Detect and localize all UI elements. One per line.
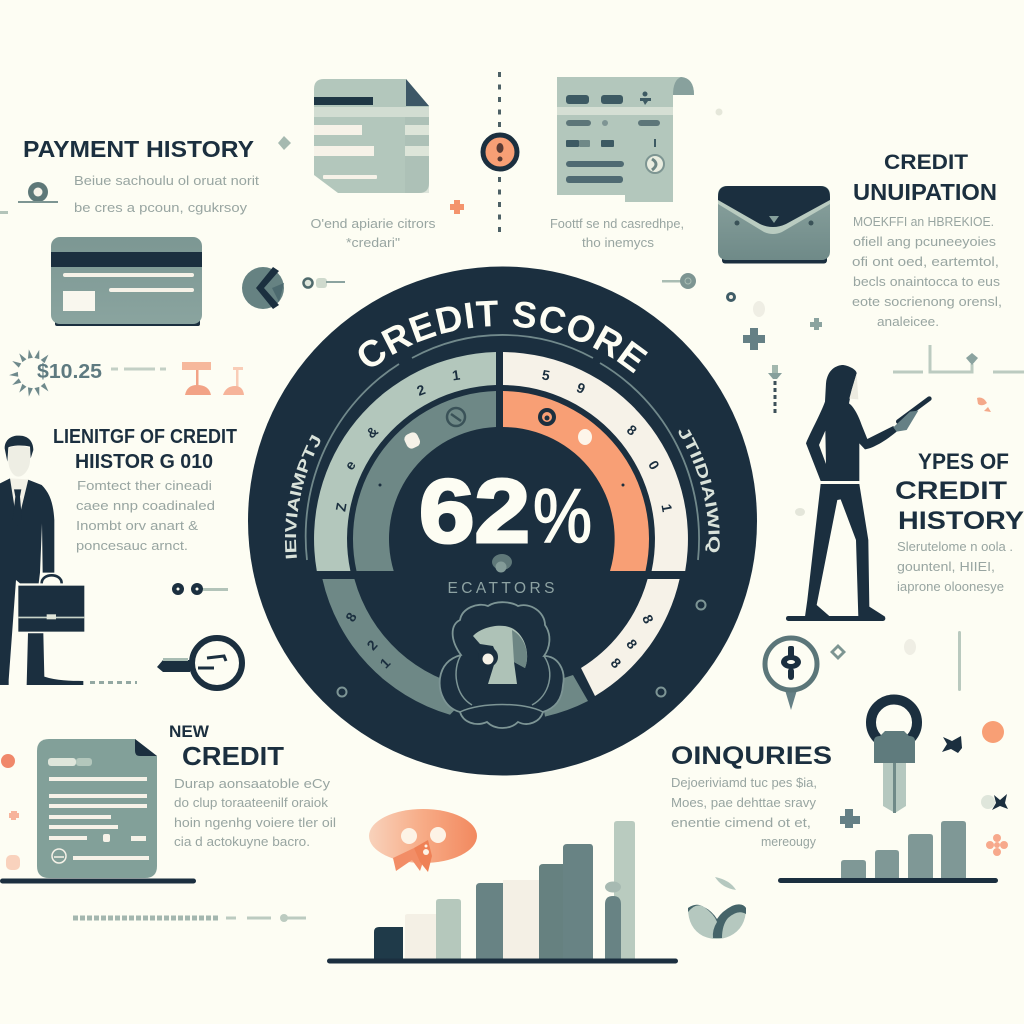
text block: new credit: hoin ngenhg voiere tler oil bbox=[174, 815, 336, 830]
heading: types of credit history: CREDIT bbox=[895, 477, 1007, 505]
faint blob bbox=[753, 301, 765, 317]
gauge numbers: 2 bbox=[415, 381, 428, 399]
text block: types of credit history: iaprone oloonesye bbox=[897, 579, 1004, 594]
text block: types of credit history: Slerutelome n oola . bbox=[897, 539, 1013, 554]
icon: teal plus bbox=[840, 809, 860, 828]
orange plus bbox=[450, 200, 464, 214]
left curved label: IEIVIAIMPTJ bbox=[284, 434, 320, 558]
gauge numbers: 1 bbox=[377, 654, 394, 671]
faint dot top bbox=[716, 108, 722, 116]
text block: inquiries: Dejoeriviamd tuc pes $ia, bbox=[671, 775, 817, 790]
big percentage: % bbox=[533, 474, 592, 559]
icon: link left of dial bbox=[304, 278, 345, 288]
bar chart: main bbox=[327, 821, 678, 964]
dotted connector bbox=[90, 681, 137, 684]
circuit connector bbox=[893, 345, 1024, 372]
peach petals bbox=[977, 398, 991, 412]
text block: length of credit history bbox=[76, 478, 215, 553]
gauge segment: bottom wedge bbox=[540, 675, 588, 717]
text block: new credit: cia d actokuyne bacro. bbox=[174, 834, 310, 849]
text block: credit utilization: analeicee. bbox=[877, 314, 939, 329]
heading: credit utilization: UNUIPATION bbox=[853, 179, 997, 205]
caption: document left bbox=[310, 216, 436, 250]
pin connector bbox=[768, 365, 782, 415]
text block: length of credit history: caee nnp coadinaled bbox=[76, 498, 215, 513]
big percentage bbox=[419, 462, 592, 562]
teal plus small bbox=[810, 318, 822, 330]
icon: twin dots connector bbox=[172, 583, 228, 595]
heading: types of credit history bbox=[895, 449, 1024, 535]
dial title: CREDIT SCORE bbox=[358, 300, 648, 374]
gauge numbers: 1 bbox=[451, 367, 461, 383]
decorative markers bbox=[278, 108, 1024, 655]
gauge numbers: 5 bbox=[541, 366, 551, 384]
text block: credit utilization bbox=[852, 214, 1002, 329]
text block: types of credit history bbox=[897, 539, 1013, 594]
gauge numbers: 8 bbox=[639, 612, 657, 626]
small rings on dial bbox=[338, 600, 706, 696]
icon: credit card bbox=[51, 237, 202, 326]
diamond marker bbox=[278, 136, 291, 150]
heading: types of credit history: HISTORY bbox=[898, 507, 1024, 535]
teal plus large bbox=[743, 328, 765, 350]
text block: payment history bbox=[74, 173, 259, 215]
gauge segment: cream outer bbox=[503, 352, 688, 571]
faint blob mid bbox=[795, 508, 805, 516]
icon: starburst with price bbox=[9, 349, 166, 397]
text block: payment history: Beiue sachoulu ol oruat norit bbox=[74, 173, 259, 188]
icon: orange dot bbox=[982, 721, 1004, 743]
gauge numbers: e bbox=[341, 457, 359, 473]
figure: woman with pointer bbox=[786, 365, 929, 621]
icon: star and light blob bbox=[981, 794, 1008, 810]
gauge numbers: 8 bbox=[342, 609, 360, 624]
icon: key bbox=[871, 700, 917, 813]
gauge numbers: 0 bbox=[645, 458, 663, 473]
dashed connector bottom bbox=[73, 914, 306, 922]
heading: new credit: NEW bbox=[169, 722, 210, 741]
gauge numbers: 1 bbox=[658, 503, 676, 513]
panel: central credit score dial bbox=[248, 266, 757, 776]
text block: credit utilization: eote socrienong orensl, bbox=[852, 294, 1002, 309]
right curved label: JTIIDIAIWIQ bbox=[678, 429, 720, 552]
gauge numbers: 8 bbox=[624, 421, 640, 439]
text block: new credit bbox=[174, 776, 336, 849]
heading: new credit bbox=[169, 722, 284, 771]
gauge segment: sage outer bbox=[314, 352, 496, 571]
text block: payment history: be cres a pcoun, cgukrsoy bbox=[74, 200, 248, 215]
caption: document left: O'end apiarie citrors bbox=[310, 216, 436, 231]
text block: credit utilization: ofi ont oed, eartemtol, bbox=[852, 254, 999, 269]
gauge inner icons bbox=[378, 408, 624, 486]
heading: length of credit history: LIENITGF OF CREDIT bbox=[53, 426, 237, 448]
faint blob low bbox=[904, 639, 916, 655]
head bbox=[5, 436, 33, 462]
gauge segment: lower right bbox=[581, 579, 680, 696]
caption: scroll bbox=[550, 216, 684, 250]
text block: length of credit history: Fomtect ther cineadi bbox=[77, 478, 212, 493]
icon: peach cross bbox=[986, 834, 1008, 856]
icon: document top left bbox=[314, 79, 429, 193]
text block: inquiries bbox=[671, 775, 817, 849]
text block: new credit: do clup toraateenilf oraiok bbox=[174, 795, 329, 810]
heading: length of credit history: HIISTOR G 010 bbox=[75, 451, 213, 473]
text block: length of credit history: Inombt orv anart & bbox=[76, 518, 198, 533]
heading: types of credit history: YPES OF bbox=[918, 449, 1009, 474]
text block: inquiries: enentie cimend ot et, bbox=[671, 815, 811, 830]
suit bbox=[0, 478, 54, 683]
question mark figure bbox=[473, 626, 527, 684]
icon: knob right of dial bbox=[662, 273, 696, 289]
right leg bbox=[27, 633, 83, 685]
icon: speech bubble with bow bbox=[369, 809, 477, 872]
gauge segment: orange inner bbox=[503, 391, 649, 571]
icon: left side decorations bbox=[1, 754, 20, 870]
heading: length of credit history bbox=[53, 426, 237, 473]
text block: credit utilization: MOEKFFI an HBREKIOE. bbox=[853, 214, 994, 229]
clover emblem bbox=[440, 602, 564, 728]
icon: ring diamond bbox=[830, 644, 846, 660]
gauge numbers: 2 bbox=[363, 637, 381, 653]
icon: envelope bbox=[718, 186, 830, 264]
gauge numbers: Z bbox=[332, 501, 350, 513]
gauge numbers: 8 bbox=[623, 636, 641, 652]
factors label: ECATTORS bbox=[448, 580, 554, 597]
heading: payment history: PAYMENT HISTORY bbox=[23, 136, 254, 162]
gauge numbers: 8 bbox=[608, 655, 625, 672]
icon: leaf globe bbox=[688, 877, 746, 939]
heading: new credit: CREDIT bbox=[182, 741, 284, 771]
text block: inquiries: mereougy bbox=[761, 834, 816, 849]
text block: types of credit history: gountenl, HIIEI, bbox=[897, 559, 995, 574]
icon: payment badge bbox=[0, 182, 58, 214]
text block: credit utilization: ofiell ang pcuneeyoies bbox=[853, 234, 997, 249]
caption: document left: *credari" bbox=[346, 235, 400, 250]
ground line: document bbox=[0, 878, 196, 884]
icon: map pin marker bbox=[765, 638, 817, 710]
icon: magnifier bbox=[157, 638, 242, 688]
gauge numbers bbox=[332, 366, 676, 672]
icon: new credit document bbox=[37, 739, 157, 878]
icon: statement scroll bbox=[557, 77, 694, 202]
text block: new credit: Durap aonsaatoble eCy bbox=[174, 776, 331, 791]
vertical divider bbox=[958, 631, 961, 691]
figure: businessman with briefcase bbox=[0, 436, 84, 685]
icon: ring top right bbox=[728, 294, 734, 300]
heading: credit utilization bbox=[853, 151, 997, 205]
heading: credit utilization: CREDIT bbox=[884, 151, 968, 174]
caption: scroll: Foottf se nd casredhpe, bbox=[550, 216, 684, 231]
gauge segment: teal inner bbox=[353, 391, 496, 571]
text block: length of credit history: poncesauc arnct. bbox=[76, 538, 188, 553]
thin outer arcs bbox=[306, 335, 699, 560]
big percentage: 62 bbox=[419, 462, 530, 562]
heading: inquiries: OINQURIES bbox=[671, 742, 832, 770]
gauge numbers: 9 bbox=[574, 379, 588, 397]
price: $10.25 bbox=[37, 361, 102, 383]
icon: dark star bbox=[942, 736, 962, 753]
text block: inquiries: Moes, pae dehttae sravy bbox=[671, 795, 817, 810]
icon: pie marker bbox=[242, 267, 284, 309]
gauge numbers: & bbox=[363, 423, 381, 441]
gauge segment: lower left bbox=[322, 579, 475, 715]
caption: scroll: tho inemycs bbox=[582, 235, 655, 250]
icon: pink stools bbox=[182, 362, 244, 395]
icon: center dashed connector with alert bbox=[483, 72, 517, 237]
text block: credit utilization: becls onaintocca to eus bbox=[853, 274, 1001, 289]
blob icon above factors label bbox=[492, 554, 512, 572]
briefcase bbox=[42, 575, 62, 583]
bar chart: small right bbox=[778, 821, 998, 883]
